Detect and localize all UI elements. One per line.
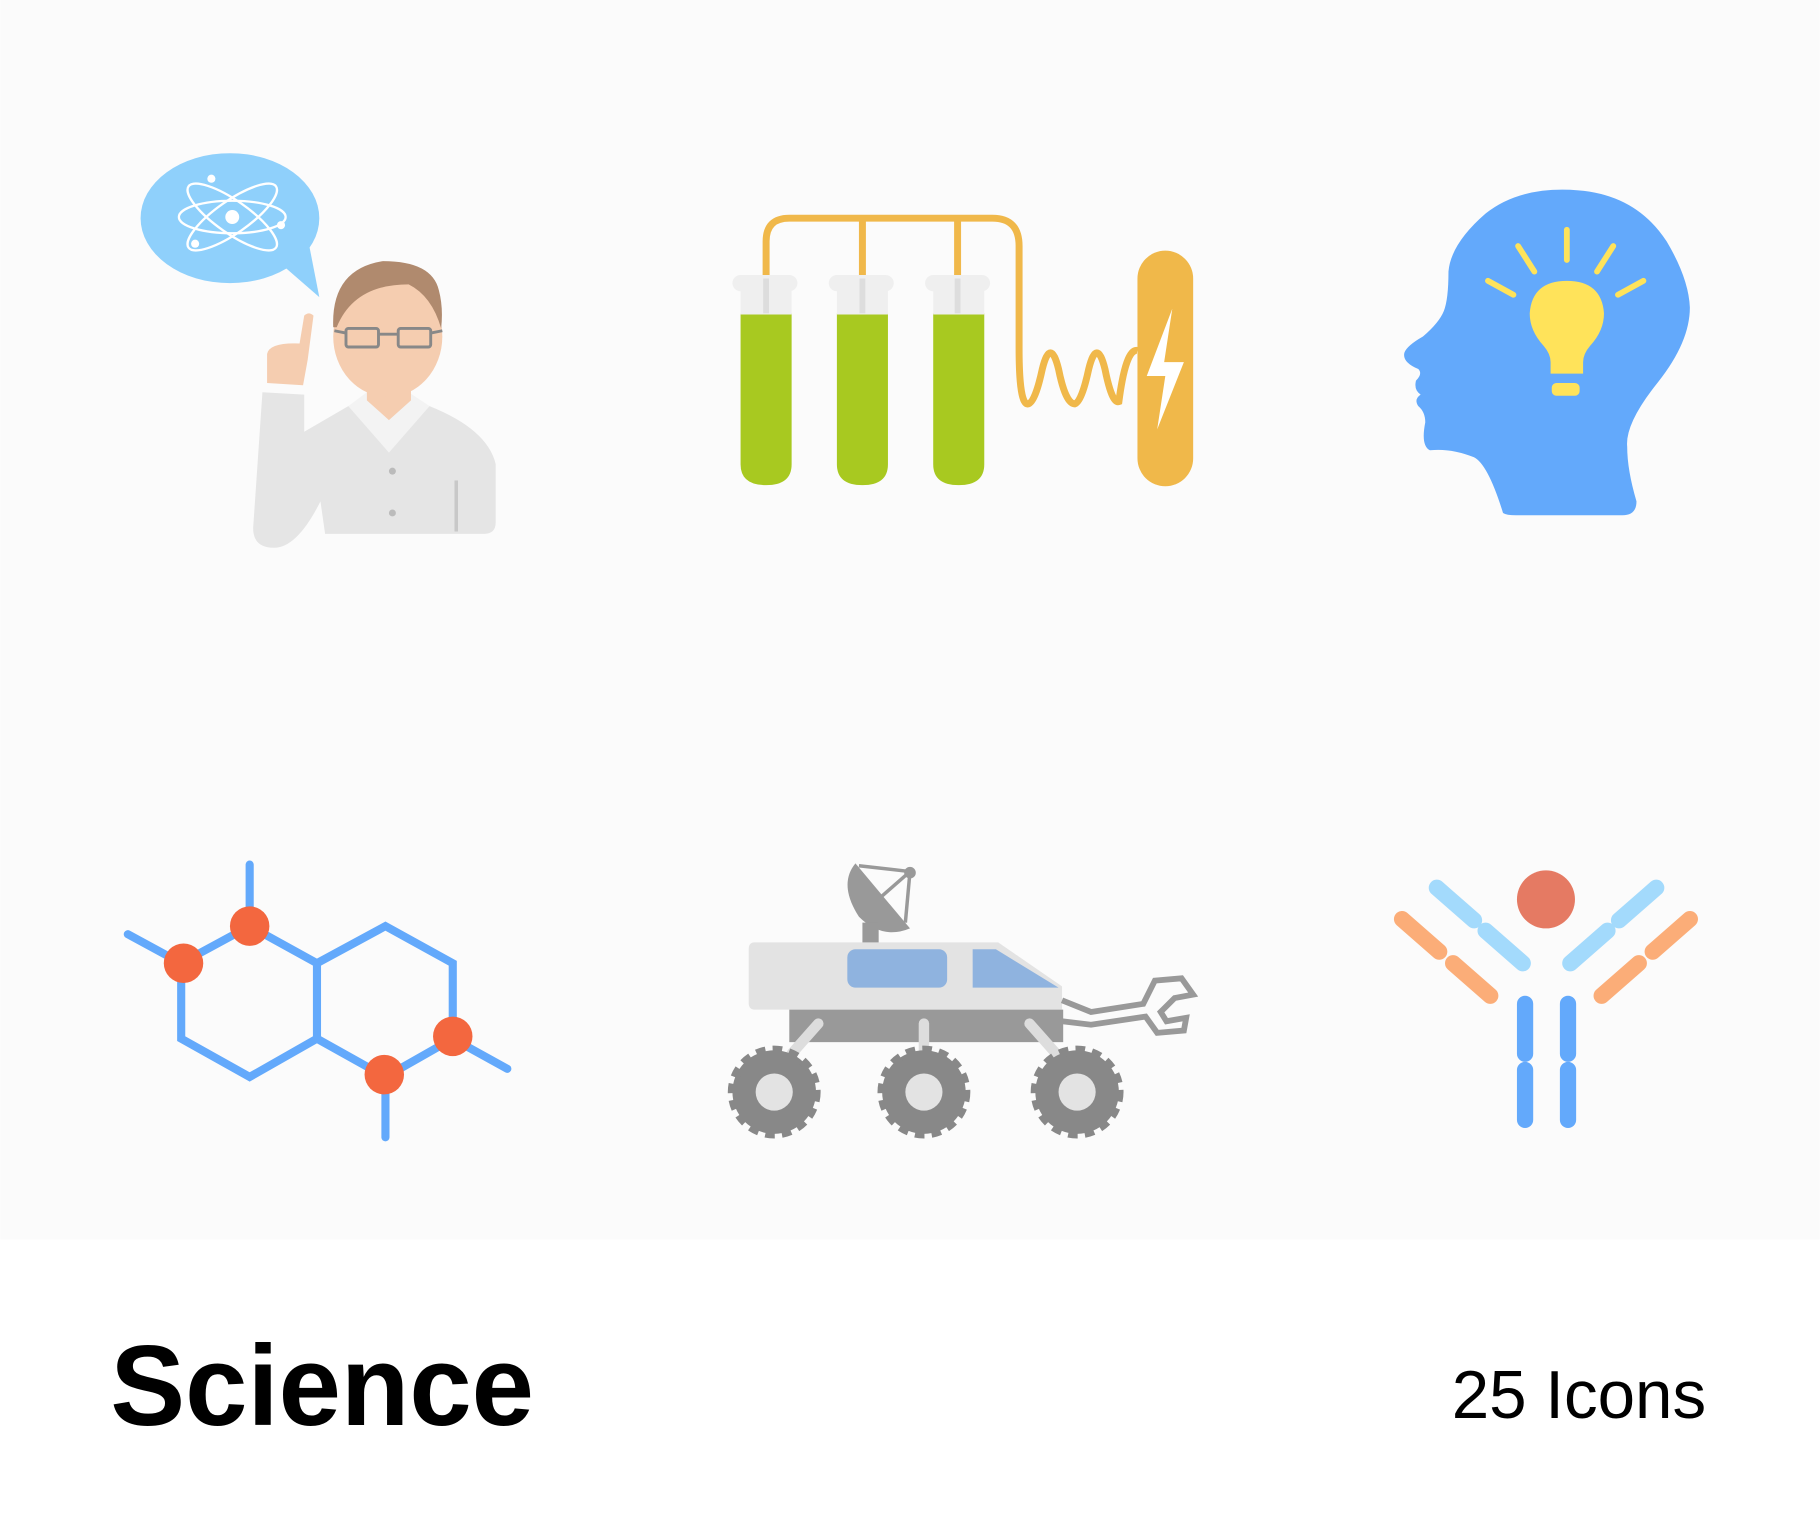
icon: antibody	[1402, 870, 1690, 1120]
icon: molecule	[128, 865, 507, 1137]
speech bubble with atom	[141, 153, 319, 297]
icon: test tubes with battery	[732, 218, 1193, 486]
icon count: 25 Icons	[1452, 1358, 1706, 1433]
person	[253, 261, 496, 548]
icon: head with light bulb	[1404, 190, 1690, 515]
icon: scientist	[141, 153, 496, 548]
title: Science	[110, 1323, 534, 1450]
icon: rover	[732, 863, 1193, 1134]
